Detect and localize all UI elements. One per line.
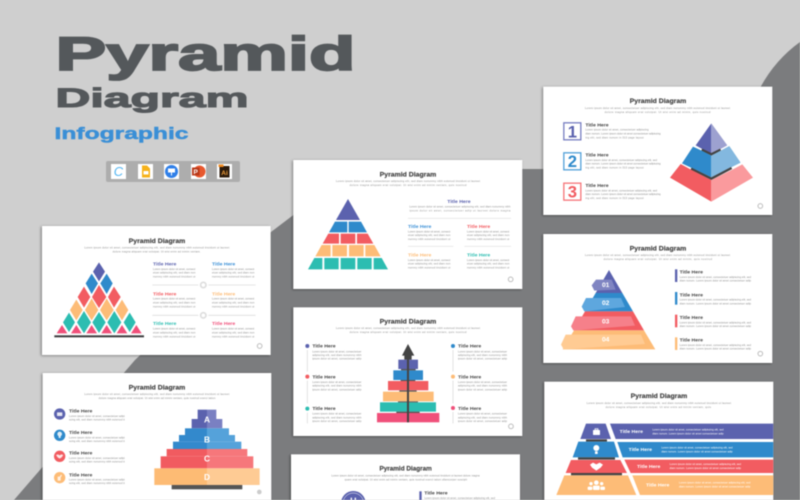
text block: Lorem ipsum dolor sit amet, consectetuer adipiscing elit, sed xyxy=(424,496,495,500)
band: orange xyxy=(632,475,773,495)
heading: Pyramid Diagram xyxy=(380,171,436,178)
icon: Keynote xyxy=(164,164,179,179)
list with icons: Title Here xyxy=(69,409,93,414)
left timeline list: adipiscing elit, sed diam nonummy nibh xyxy=(312,415,362,419)
numbered list: diam nonum. Lorem ipsum dolor sit amet consectetuer adipiscing xyxy=(585,162,661,166)
intro text xyxy=(336,179,480,187)
right timeline list: ipsum dolor sit amet, consectetuer adip xyxy=(458,387,507,391)
text block column right: Lorem ipsum dolor sit amet, consect xyxy=(212,327,255,331)
intro text xyxy=(585,106,730,114)
numbered list: ing elit, sed diam nonum in 313 page layout xyxy=(585,166,644,170)
right timeline list: Title Here xyxy=(458,406,482,411)
list with icons xyxy=(54,408,125,485)
four text blocks: Title Here xyxy=(408,253,432,258)
numbered list: diam nonum. Lorem ipsum dolor sit amet consectetuer adipiscing xyxy=(585,192,661,196)
list with icons: Title Here xyxy=(69,451,93,456)
left timeline list: ipsum dolor sit amet, consectetuer adip xyxy=(312,419,362,423)
intro text: dolore magna aliquam erat volutpat. Ut wisi enim ad minim, quis nostrud xyxy=(604,257,712,261)
numbered list: Title Here xyxy=(585,122,609,127)
right timeline list: adipiscing elit, sed diam nonummy nibh xyxy=(458,384,507,388)
four text blocks: nummy nibh euismod tincidunt ut xyxy=(408,237,451,241)
top text block: ipsum dolor sit amet, consectetuer adip ut laoreet dolore magna xyxy=(409,208,511,212)
left timeline list: Title Here xyxy=(312,344,336,349)
intro text: Lorem ipsum dolor sit amet, consectetuer adipiscing elit, sed diam nonummy nibh euismod tincidunt ut laoreet xyxy=(587,401,731,405)
text block column left: nummy nibh euismod tincidunt ut xyxy=(153,274,196,278)
numbered list: ing elit, sed diam nonum in 313 page layout xyxy=(585,196,644,200)
four text blocks: Lorem ipsum dolor sit amet, consect xyxy=(408,258,451,262)
panel: brick pyramid xyxy=(293,160,522,289)
text block column right: Title Here xyxy=(212,262,236,267)
panel: stepped pyramid A B C D xyxy=(43,373,271,500)
band: orange: Lorem ipsum dolor sit amet, consectetuer adipiscing elit, sed xyxy=(679,481,751,485)
intro text: Lorem ipsum dolor sit amet, consectetuer adipiscing elit, sed diam nonummy nibh euismod tincidunt ut laoreet dolore magna xyxy=(331,473,480,477)
intro text: dolore magna aliquam erat volutpat. Ut wisi enim ad minim veniam. xyxy=(113,250,201,254)
tier pyramid chart: 01 xyxy=(602,282,610,289)
right timeline list: Lorem ipsum dolor sit amet, consectetuer xyxy=(458,380,507,384)
text block column left: Lorem ipsum dolor sit amet, consect xyxy=(153,297,196,301)
numbered list: 1 xyxy=(568,122,577,141)
numbered list: 3 xyxy=(568,182,577,201)
list with icons: Title Here xyxy=(69,472,93,477)
stacked bars with arrow xyxy=(377,344,439,422)
text block column left: Title Here xyxy=(153,291,177,296)
text list with colour bars: diam nonum. Lorem ipsum dolor sit amet consectetuer adip xyxy=(680,324,751,328)
software icon toolbar xyxy=(106,161,240,182)
intro text: Lorem ipsum dolor sit amet, consectetuer adipiscing elit, sed diam nonummy nibh euismod tincidunt ut laoreet xyxy=(84,392,230,396)
band: red xyxy=(624,460,773,473)
text list with colour bars: Title Here xyxy=(680,270,703,275)
band: purple: diam nonum. Lorem ipsum dolor sit amet consectetuer adip xyxy=(652,431,724,435)
left timeline list: Title Here xyxy=(312,406,336,411)
list with icons: Title Here xyxy=(69,430,93,435)
band: purple: Title Here xyxy=(620,429,643,434)
four text blocks: Title Here xyxy=(467,224,491,229)
left timeline list: ipsum dolor sit amet, consectetuer adip xyxy=(312,357,362,361)
list with icons: scing elit, sed diam nonummy nibh euismod ti xyxy=(69,439,125,443)
panel: numbered 3D pyramid xyxy=(543,87,772,215)
right timeline list: adipiscing elit, sed diam nonummy nibh xyxy=(458,353,507,357)
numbered list xyxy=(564,122,661,201)
intro text: dolore magna aliquam erat volutpat. Ut wisi enim ad minim veniam, quis nostrud xyxy=(350,183,467,187)
text list with colour bars: Lorem ipsum dolor sit amet, consectetuer adipiscing elit, sed xyxy=(680,275,751,279)
band: red: Lorem ipsum dolor sit amet, consectetuer adipiscing elit, sed xyxy=(670,462,741,466)
four text blocks xyxy=(408,224,510,270)
heading: Pyramid Diagram xyxy=(630,98,686,105)
icon: handshake xyxy=(590,463,603,471)
right timeline list: adipiscing elit, sed diam nonummy nibh xyxy=(458,415,507,419)
four text blocks: nummy nibh euismod tincidunt ut xyxy=(408,266,451,270)
right timeline list: Title Here xyxy=(458,344,482,349)
text list with colour bars: Lorem ipsum dolor sit amet, consectetuer adipiscing elit, sed xyxy=(680,320,751,324)
text list with colour bars: diam nonum. Lorem ipsum dolor sit amet consectetuer adip xyxy=(680,279,751,283)
heading: Pyramid Diagram xyxy=(380,319,436,326)
intro text: Lorem ipsum dolor sit amet, consectetuer adipiscing elit, sed diam nonummy nibh euismod tincidunt ut laoreet xyxy=(585,106,730,110)
intro text: Lorem ipsum dolor sit amet, consectetuer adipiscing elit, sed diam nonummy nibh euismod tincidunt ut laoreet xyxy=(336,179,480,183)
text block column left: etuer adipiscing elit, sed diam non xyxy=(153,271,196,275)
panel: arrow pyramid xyxy=(293,307,522,436)
right timeline list: Lorem ipsum dolor sit amet, consectetuer xyxy=(458,412,507,416)
tier pyramid chart: 02 xyxy=(602,300,610,307)
tier pyramid chart: 03 xyxy=(602,318,610,325)
text block column right: Lorem ipsum dolor sit amet, consect xyxy=(212,297,255,301)
text block column right: nummy nibh euismod tincidunt ut xyxy=(212,334,255,338)
top text block: Title Here xyxy=(447,199,471,204)
text block column left: Lorem ipsum dolor sit amet, consect xyxy=(153,267,196,271)
band: blue: diam nonum. Lorem ipsum dolor sit amet consectetuer adip xyxy=(661,449,733,453)
text block column left: nummy nibh euismod tincidunt ut xyxy=(153,334,196,338)
heading: Pyramid Diagram xyxy=(631,393,687,400)
text list with colour bars: Lorem ipsum dolor sit amet, consectetuer adipiscing elit, sed xyxy=(680,343,751,347)
3D pyramid chart xyxy=(670,123,753,202)
panel: diamond pyramid xyxy=(42,226,271,355)
main title xyxy=(54,27,356,143)
left timeline list: adipiscing elit, sed diam nonummy nibh xyxy=(312,353,362,357)
list with icons: Lorem ipsum dolor sit amet, consectetuer adipi xyxy=(69,414,125,418)
text list with colour bars: Title Here xyxy=(680,315,703,320)
pyramid tiers with icons xyxy=(556,424,636,495)
band: orange: diam nonum. Lorem ipsum dolor sit amet consectetuer adip xyxy=(679,485,751,489)
text list with colour bars xyxy=(675,269,751,351)
brick pyramid chart xyxy=(308,199,388,269)
text block column right: etuer adipiscing elit, sed diam non xyxy=(212,271,255,275)
list with icons: scing elit, sed diam nonummy nibh euismod ti xyxy=(69,418,125,422)
stepped pyramid chart xyxy=(154,410,260,489)
text list with colour bars: diam nonum. Lorem ipsum dolor sit amet consectetuer adip xyxy=(680,301,751,305)
left timeline list: Title Here xyxy=(312,374,336,379)
text block column right: nummy nibh euismod tincidunt ut xyxy=(212,304,255,308)
intro text xyxy=(336,326,480,334)
left timeline list xyxy=(305,344,362,423)
numbered list: diam nonum. Lorem ipsum dolor sit amet consectetuer adipiscing xyxy=(585,131,661,135)
four text blocks: nummy nibh euismod tincidunt ut xyxy=(467,266,510,270)
intro text xyxy=(585,253,730,261)
text list with colour bars: diam nonum. Lorem ipsum dolor sit amet consectetuer adip xyxy=(680,347,751,351)
intro text xyxy=(84,246,230,254)
intro text: Lorem ipsum dolor sit amet, consectetuer adipiscing elit, sed diam nonummy nibh euismod tincidunt ut laoreet xyxy=(336,326,480,330)
intro text: Lorem ipsum dolor sit amet, consectetuer adipiscing elit, sed diam nonummy nibh euismod tincidunt ut laoreet xyxy=(84,246,230,250)
four text blocks: etuer adipiscing elit, sed diam non xyxy=(408,233,451,237)
right timeline list: Title Here xyxy=(458,374,482,379)
icon: light bulb xyxy=(593,445,599,454)
band: red: Title Here xyxy=(637,464,661,469)
text block column right: Title Here xyxy=(212,321,236,326)
tier pyramid chart xyxy=(561,270,655,349)
text block column right: etuer adipiscing elit, sed diam non xyxy=(212,330,255,334)
list with icons: Lorem ipsum dolor sit amet, consectetuer adipi xyxy=(69,456,125,460)
icon: Canva: C xyxy=(114,164,124,179)
four text blocks: Lorem ipsum dolor sit amet, consect xyxy=(467,258,510,262)
left timeline list: adipiscing elit, sed diam nonummy nibh xyxy=(312,384,362,388)
right timeline list xyxy=(451,344,507,423)
stepped pyramid chart: B xyxy=(204,434,210,444)
text list with colour bars: Lorem ipsum dolor sit amet, consectetuer adipiscing elit, sed xyxy=(680,298,751,302)
icon: Illustrator: Ai xyxy=(221,170,228,177)
band: blue: Lorem ipsum dolor sit amet, consectetuer adipiscing elit, sed xyxy=(661,445,733,449)
list with icons: scing elit, sed diam nonummy nibh euismod ti xyxy=(69,481,125,485)
intro text: dolore magna aliquam erat volutpat. Ut wisi enim ad minim veniam, quis xyxy=(606,405,712,409)
intro text: quam erat volutpat. Ut wisi enim ad minim veniam, quis nostrud exerci tation ullamcorper suscipit xyxy=(345,477,467,481)
band: blue: Title Here xyxy=(629,447,652,452)
left timeline list: Lorem ipsum dolor sit amet, consectetuer xyxy=(312,349,361,353)
text block xyxy=(419,491,495,500)
intro text: dolore magna aliquam erat volutpat. Ut wisi enim ad minim veniam, quis nostrud exerci tation xyxy=(99,396,216,400)
band: purple xyxy=(610,424,773,439)
list with icons: Lorem ipsum dolor sit amet, consectetuer adipi xyxy=(69,435,125,439)
four text blocks: etuer adipiscing elit, sed diam non xyxy=(467,233,510,237)
tier pyramid chart: 04 xyxy=(602,336,610,343)
panel: numbered tier pyramid xyxy=(543,234,772,363)
numbered list: Title Here xyxy=(585,183,609,188)
text block column left: etuer adipiscing elit, sed diam non xyxy=(153,330,196,334)
four text blocks: etuer adipiscing elit, sed diam non xyxy=(467,262,510,266)
text block column right xyxy=(212,262,255,338)
stepped pyramid chart: D xyxy=(204,472,210,482)
four text blocks: etuer adipiscing elit, sed diam non xyxy=(408,262,451,266)
four text blocks: nummy nibh euismod tincidunt ut xyxy=(467,237,510,241)
band: orange: Title Here xyxy=(646,483,670,488)
text block column left: etuer adipiscing elit, sed diam non xyxy=(153,300,196,304)
band: blue xyxy=(617,442,773,457)
top text block xyxy=(409,199,511,212)
text block column right: Title Here xyxy=(212,291,236,296)
stepped pyramid chart: C xyxy=(204,454,210,464)
list with icons: Lorem ipsum dolor sit amet, consectetuer adipi xyxy=(69,477,125,481)
heading: Pyramid Diagram xyxy=(379,466,432,473)
intro text xyxy=(331,473,480,481)
text block column right: etuer adipiscing elit, sed diam non xyxy=(212,300,255,304)
icon: people xyxy=(588,480,605,490)
list with icons: scing elit, sed diam nonummy nibh euismod ti xyxy=(69,460,125,464)
left timeline list: ipsum dolor sit amet, consectetuer adip xyxy=(312,387,362,391)
numbered list: Lorem ipsum dolor sit amet, consectetuer adipiscing xyxy=(585,128,649,132)
right timeline list: ipsum dolor sit amet, consectetuer adip xyxy=(458,419,507,423)
intro text: Lorem ipsum dolor sit amet, consectetuer adipiscing elit, sed diam nonummy nibh euismod tincidunt ut laoreet xyxy=(585,253,730,257)
right timeline list: Lorem ipsum dolor sit amet, consectetuer xyxy=(458,349,507,353)
four text blocks: Title Here xyxy=(408,224,432,229)
four text blocks: Lorem ipsum dolor sit amet, consect xyxy=(467,229,510,233)
panel: partially visible circle slide xyxy=(291,454,520,500)
icon: Google Slides xyxy=(138,164,153,179)
numbered list: Title Here xyxy=(585,153,609,158)
text block column left: Lorem ipsum dolor sit amet, consect xyxy=(153,327,196,331)
intro text: dolore magna aliquam erat volutpat. Ut wisi enim ad minim veniam, quis nostrud xyxy=(350,330,467,334)
icon: briefcase xyxy=(593,429,600,435)
text block column left: Title Here xyxy=(153,321,177,326)
stepped pyramid chart: A xyxy=(204,414,210,424)
diamond pyramid chart xyxy=(54,262,144,337)
main title: Infographic xyxy=(54,124,188,143)
intro text xyxy=(587,401,731,409)
right timeline list: ipsum dolor sit amet, consectetuer adip xyxy=(458,357,507,361)
circle icon xyxy=(341,491,366,500)
text list with colour bars: Title Here xyxy=(680,292,703,297)
four text blocks: Lorem ipsum dolor sit amet, consect xyxy=(408,229,451,233)
numbered list: ing elit, sed diam nonum in 313 page layout xyxy=(585,135,644,139)
text block column right: Lorem ipsum dolor sit amet, consect xyxy=(212,267,255,271)
panel: banded pyramid xyxy=(544,382,773,500)
band: red: diam nonum. Lorem ipsum dolor sit amet consectetuer adip xyxy=(670,466,741,470)
main title: Diagram xyxy=(56,83,248,113)
main title: Pyramid xyxy=(56,27,356,80)
heading: Pyramid Diagram xyxy=(630,246,686,253)
left timeline list: Lorem ipsum dolor sit amet, consectetuer xyxy=(312,380,361,384)
heading: Pyramid Diagram xyxy=(129,384,185,391)
numbered list: Lorem ipsum dolor sit amet, consectetuer adipiscing elit, sed xyxy=(585,188,658,192)
four text blocks: Title Here xyxy=(467,253,491,258)
numbered list: 2 xyxy=(568,152,577,171)
intro text xyxy=(84,392,230,400)
text block column right: nummy nibh euismod tincidunt ut xyxy=(212,274,255,278)
intro text: dolore magna aliquam erat volutpat. Ut wisi enim ad minim, quis nostrud xyxy=(605,110,711,114)
text block column left: Title Here xyxy=(153,262,177,267)
heading: Pyramid Diagram xyxy=(129,238,185,245)
text block: Title Here xyxy=(424,491,448,496)
text block column left: nummy nibh euismod tincidunt ut xyxy=(153,304,196,308)
icon: PowerPoint: P xyxy=(194,169,199,176)
text list with colour bars: Title Here xyxy=(680,337,703,342)
band: purple: Lorem ipsum dolor sit amet, consectetuer adipiscing elit, sed xyxy=(652,427,724,431)
numbered list: Lorem ipsum dolor sit amet, consectetuer adipiscing elit, sed xyxy=(585,158,658,162)
text block column left xyxy=(153,262,196,338)
left timeline list: Lorem ipsum dolor sit amet, consectetuer xyxy=(312,412,361,416)
top text block: Lorem ipsum dolor sit amet, consectetuer adipiscing elit, sed diam nonummy nibh xyxy=(409,204,511,208)
